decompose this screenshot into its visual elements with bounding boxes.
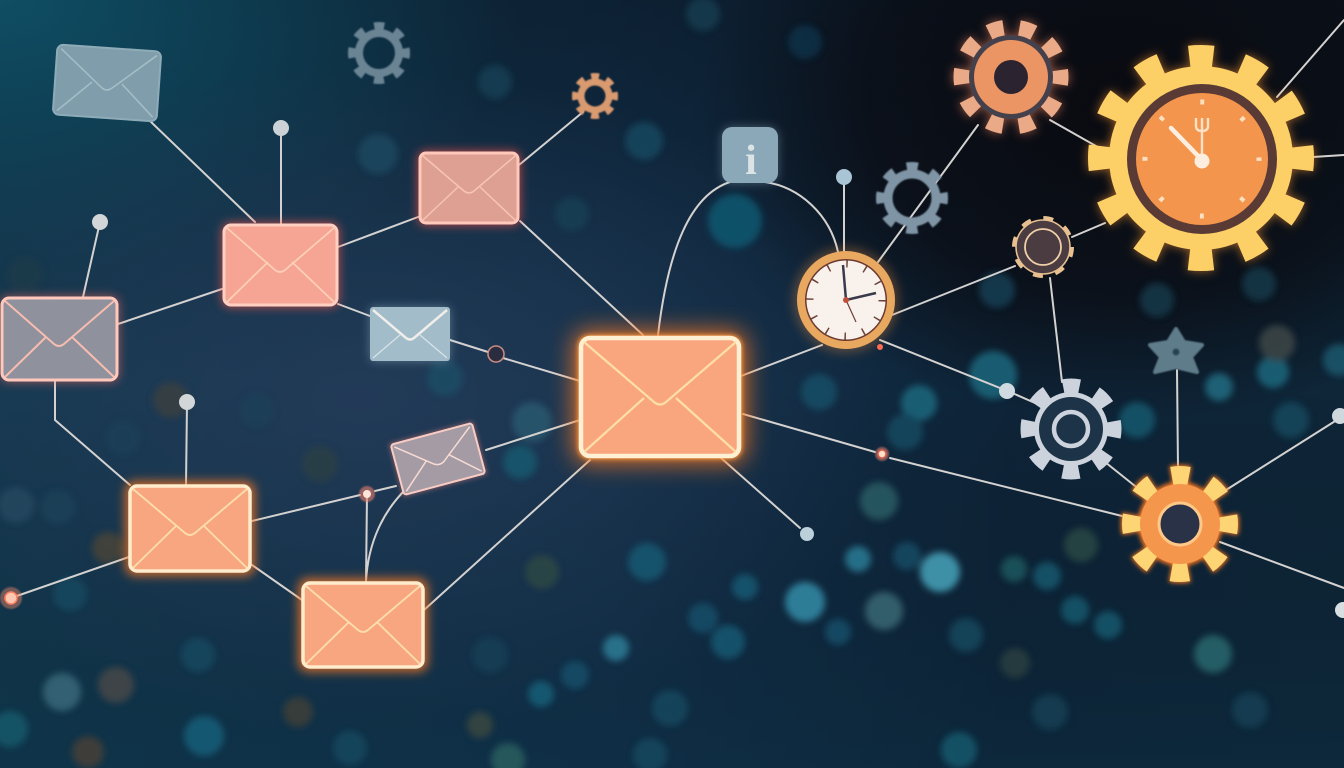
envelope: central main — [574, 331, 746, 463]
connector lines — [11, 20, 1344, 610]
envelope: lower left orange — [125, 481, 255, 576]
envelope: pale blue — [370, 307, 450, 361]
envelope: left grey pink — [0, 296, 119, 382]
gear: faded top left — [352, 26, 406, 80]
gear: orange lower right — [1132, 476, 1228, 572]
network nodes — [0, 120, 1344, 618]
gear: small orange top — [575, 76, 615, 116]
icon: info badge — [722, 127, 778, 184]
envelope: upper coral — [222, 223, 339, 307]
icon: star — [1150, 329, 1202, 372]
envelope: top centre coral — [418, 151, 520, 225]
gear: orange top right — [962, 28, 1060, 126]
envelope: faded top left — [53, 44, 161, 122]
envelope: tilted grey — [388, 421, 488, 497]
clock — [793, 247, 899, 353]
icon: info badge: i — [745, 138, 757, 184]
gear: clock gear large — [1099, 56, 1303, 260]
envelope: lower centre orange — [298, 578, 428, 672]
gear: small grey near clock — [881, 167, 943, 229]
gear: small dark ring — [1014, 218, 1072, 276]
gear: grey middle right — [1029, 387, 1113, 471]
